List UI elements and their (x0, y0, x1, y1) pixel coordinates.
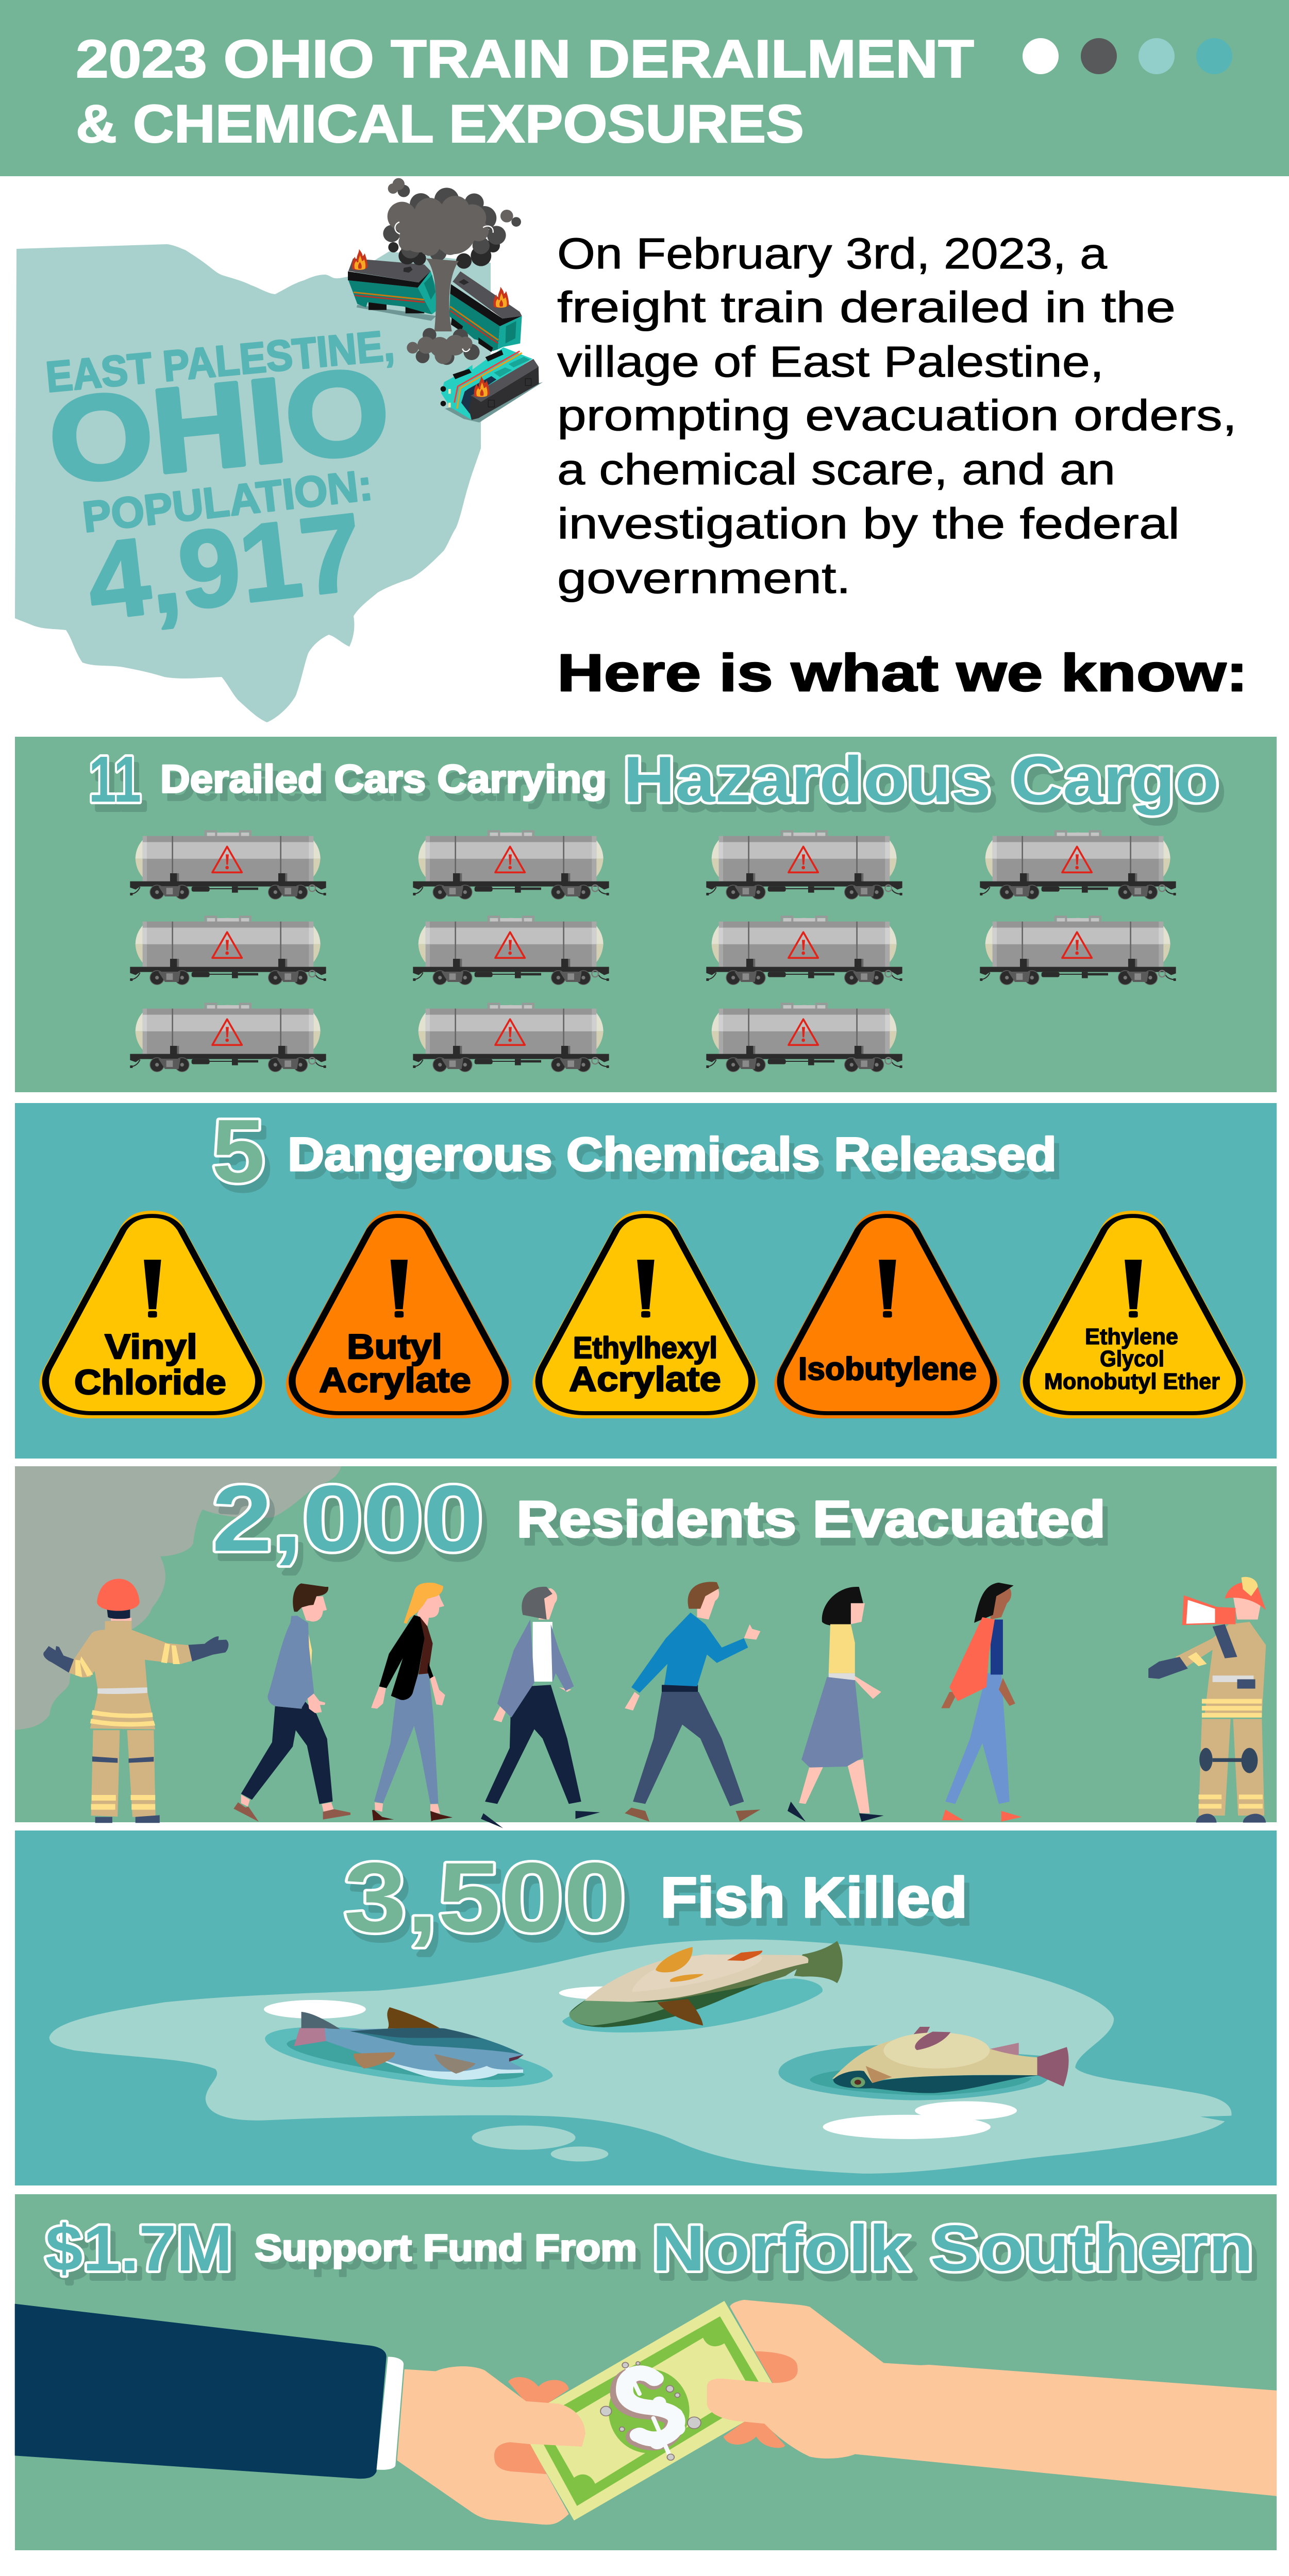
heading: 11 derailed cars (89, 743, 1219, 816)
location name and population: POPULATION: (80, 461, 375, 541)
remaining evacuees and megaphone firefighter (481, 1577, 1266, 1828)
sign: ethylene glycol monobutyl ether: Glycol (1100, 1346, 1164, 1371)
title: 2023 OHIO TRAIN DERAILMENT (76, 29, 974, 89)
location name and population: EAST PALESTINE, (44, 321, 396, 401)
intro paragraph: freight train derailed in the (557, 283, 1176, 331)
warning signs (39, 1211, 1246, 1418)
heading: 3,500 fish killed: Fish Killed (660, 1866, 967, 1929)
right hand (707, 2300, 1277, 2496)
heading: 3,500 fish killed (344, 1842, 967, 1953)
shadows under train (357, 305, 543, 422)
derailed car left (348, 259, 437, 314)
smoke plume (383, 178, 521, 365)
heading: 11 derailed cars: 11 (89, 743, 141, 816)
heading: 2,000 residents evacuated (212, 1466, 1106, 1571)
sign: vinyl chloride: Vinyl (105, 1327, 197, 1366)
shirt cuff (377, 2357, 404, 2470)
decorative dots (1023, 38, 1232, 74)
heading: 5 dangerous chemicals: 5 (212, 1100, 265, 1201)
sign: butyl acrylate (286, 1211, 511, 1418)
sign: butyl acrylate: Butyl (347, 1327, 442, 1366)
intro paragraph: On February 3rd, 2023, a (557, 229, 1107, 278)
evacuee: woman in coral jacket (941, 1583, 1022, 1822)
fish: speckled trout (562, 1941, 843, 2032)
fish: yellow (778, 2027, 1069, 2100)
evacuee: woman in skirt (788, 1587, 884, 1822)
sign: ethylene glycol monobutyl ether: Ethylene (1085, 1324, 1178, 1349)
illustration: derailed train with smoke (348, 178, 543, 422)
panel: residents evacuated (15, 1466, 1277, 1828)
intro paragraph (557, 229, 1237, 602)
heading: 5 dangerous chemicals (212, 1100, 1057, 1201)
derailed car right (449, 272, 522, 352)
title: & CHEMICAL EXPOSURES (76, 94, 804, 154)
panel: support fund (15, 2194, 1277, 2550)
intro paragraph: prompting evacuation orders, (557, 391, 1237, 439)
back fingers (508, 2377, 785, 2448)
sign: isobutylene (774, 1211, 1000, 1418)
heading: 2,000 residents evacuated: Residents Evacuated (516, 1490, 1106, 1548)
panel: hazardous cargo (15, 737, 1277, 1092)
panel: fish killed (15, 1831, 1277, 2185)
heading: $1.7M support fund: Support Fund From (255, 2228, 637, 2269)
firefighter left (43, 1579, 228, 1823)
evacuee: blonde woman in black jacket (371, 1583, 453, 1821)
sign: ethylhexyl acrylate: Acrylate (569, 1360, 721, 1399)
location name and population: 4,917 (81, 490, 369, 643)
intro paragraph: village of East Palestine, (557, 337, 1104, 386)
intro paragraph: a chemical scare, and an (557, 445, 1115, 494)
left hand (397, 2366, 585, 2524)
intro paragraph: investigation by the federal (557, 499, 1180, 548)
sign: ethylhexyl acrylate (532, 1211, 758, 1418)
title (76, 29, 974, 154)
heading: $1.7M support fund: $1.7M (45, 2212, 232, 2284)
fish: blue (265, 2007, 553, 2087)
sign: ethylene glycol monobutyl ether: Monobutyl Ether (1044, 1369, 1220, 1394)
heading: 11 derailed cars: Hazardous Cargo (623, 743, 1219, 816)
sign: isobutylene: Isobutylene (798, 1351, 977, 1387)
sign: vinyl chloride: Chloride (74, 1363, 226, 1402)
locomotive on its side (441, 347, 539, 420)
location name and population (43, 321, 396, 643)
firefighter with megaphone (1148, 1577, 1266, 1823)
header band (0, 0, 1289, 176)
sign: ethylhexyl acrylate: Ethylhexyl (573, 1331, 717, 1365)
dead fish (265, 1941, 1069, 2100)
subheading: Here is what we know: (557, 643, 1248, 702)
sign: butyl acrylate: Acrylate (319, 1361, 471, 1400)
hands exchanging money (15, 2300, 1277, 2524)
sign: ethylene glycol monobutyl ether (1020, 1211, 1246, 1418)
evacuee: man in grey-blue jacket (233, 1583, 350, 1822)
tank cars grid (130, 831, 1176, 1072)
heading: $1.7M support fund (45, 2212, 1253, 2284)
heading: 5 dangerous chemicals: Dangerous Chemicals Released (288, 1128, 1057, 1181)
heading: 3,500 fish killed: 3,500 (344, 1842, 626, 1953)
smoke cloud (15, 1466, 341, 1730)
panel: dangerous chemicals (15, 1100, 1277, 1459)
intro paragraph: government. (557, 554, 851, 602)
fires (352, 249, 509, 397)
sign: vinyl chloride (39, 1211, 265, 1418)
heading: 2,000 residents evacuated: 2,000 (212, 1466, 483, 1571)
map of Ohio with location callout (15, 244, 491, 722)
polluted pond (49, 1939, 1232, 2174)
evacuee: man in blue shirt (625, 1582, 760, 1822)
heading: 11 derailed cars: Derailed Cars Carrying (160, 757, 607, 801)
sleeve (15, 2304, 387, 2479)
location name and population: OHIO (43, 343, 395, 509)
smoke dollar sign (600, 2362, 701, 2460)
people evacuating (43, 1577, 1266, 1828)
evacuee: grey-haired woman (481, 1587, 600, 1828)
dollar bill (516, 2301, 782, 2520)
heading: $1.7M support fund: Norfolk Southern (652, 2212, 1253, 2284)
